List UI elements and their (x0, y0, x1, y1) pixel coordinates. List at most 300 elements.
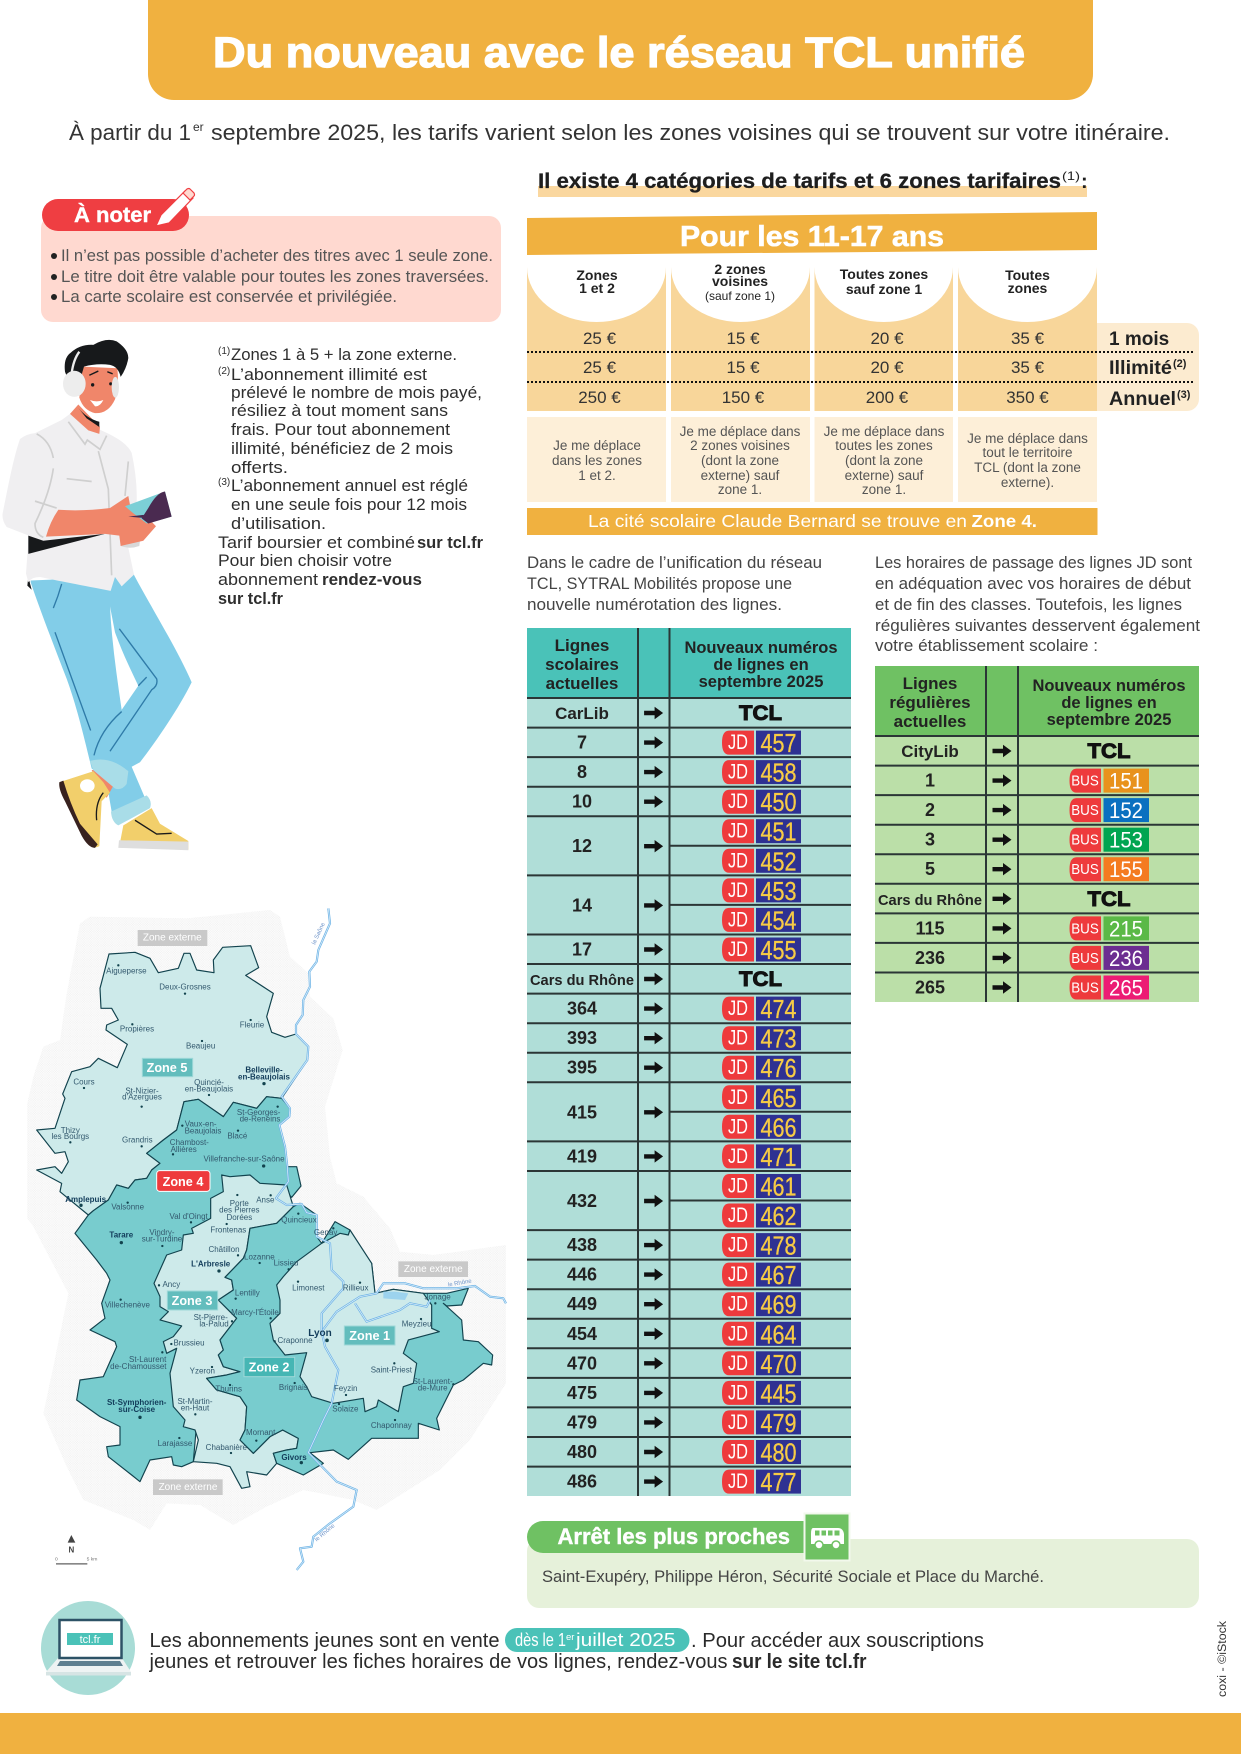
column: toutes zones: 350 € (1006, 388, 1049, 407)
intro text: lignes régulières: votre établissement scolaire : (875, 637, 1098, 655)
row: 3 to BUS 153: BUS (1071, 832, 1099, 849)
row: 415 to JD 465 and 466: 465 (760, 1083, 796, 1113)
town labels north: Grandris (122, 1136, 153, 1145)
town labels south: St-Martin- (177, 1397, 213, 1406)
footnotes: sur tcl.fr (417, 533, 483, 552)
town labels south: L'Arbresle (191, 1260, 231, 1269)
town labels south: Craponne (277, 1336, 313, 1345)
footnotes: Tarif boursier et combiné (218, 533, 415, 552)
town labels north: Fleurie (240, 1020, 265, 1029)
town labels north: Beaujolais (185, 1127, 221, 1136)
river names: le Rhône (314, 1523, 337, 1543)
row: 454 to JD 464: 454 (567, 1324, 597, 1344)
footer band (0, 1713, 1241, 1754)
footnotes: (3) (218, 477, 230, 488)
footnotes: sur tcl.fr (218, 589, 283, 608)
row: 7 to JD 457: 457 (760, 728, 796, 758)
intro text: lignes régulières: et de fin des classes. Toutefois, les lignes (875, 596, 1182, 614)
banner: pour les 11-17 ans (527, 212, 1097, 255)
subtitle: À partir du 1 (69, 120, 191, 145)
heading: catégories de tarifs: (1) (1062, 169, 1080, 183)
column: zones 1 et 2: 1 et 2 (579, 280, 615, 296)
zone labels: Zone 1 (349, 1329, 390, 1343)
description: 2 zones voisines: Je me déplace dans (680, 424, 801, 439)
footnotes: en une seule fois pour 12 mois (231, 495, 467, 514)
heading: catégories de tarifs: : (1081, 171, 1088, 193)
table header: scolaires (545, 655, 619, 674)
town labels north: des Pierres (219, 1206, 260, 1215)
header banner (148, 0, 1093, 100)
row: 2 to BUS 152 (925, 798, 1149, 823)
town labels south: Ancy (162, 1280, 180, 1289)
date pill: dès le 1 (515, 1630, 566, 1650)
row: 14 to JD 453 and 454: 454 (760, 905, 796, 935)
town labels south: la-Palud (199, 1320, 229, 1329)
row: 14 to JD 453 and 454 (572, 876, 801, 935)
town labels south: St-Laurent (129, 1355, 167, 1364)
bottom text (149, 1628, 984, 1673)
banner: pour les 11-17 ans: Pour les 11-17 ans (680, 221, 944, 253)
row: 17 to JD 455: 17 (572, 940, 592, 960)
row: CarLib: TCL (739, 702, 782, 725)
footnotes: L’abonnement illimité est (231, 365, 427, 384)
row: 10 to JD 450: 450 (760, 787, 796, 817)
row: 432 to JD 461 and 462: 462 (760, 1201, 796, 1231)
row: 486 to JD 477: 486 (567, 1472, 597, 1492)
row: 236 to BUS 236 (915, 946, 1149, 971)
town labels north: Beaujeu (186, 1041, 215, 1050)
column: 2 zones voisines: (sauf zone 1) (705, 289, 775, 303)
column: toutes zones sauf zone 1: 200 € (866, 388, 909, 407)
description: zones 1 et 2 (527, 417, 666, 502)
heading: catégories de tarifs: Il existe 4 catégories de tarifs et 6 zones tarifaires (538, 170, 1061, 193)
row: 449 to JD 469: 469 (760, 1290, 796, 1320)
town labels north: de-Reneins (240, 1115, 280, 1124)
heading: Arrêt les plus proches (558, 1524, 790, 1549)
row: 115 to BUS 215 (915, 916, 1149, 941)
row: 364 to JD 474: JD (728, 997, 748, 1020)
town labels south: Lentilly (235, 1289, 260, 1298)
footnotes (218, 345, 483, 608)
row: 432 to JD 461 and 462: 461 (760, 1172, 796, 1202)
panel: tarifs 11-17 ans (527, 212, 1199, 535)
row: 17 to JD 455: 455 (760, 935, 796, 965)
town labels north: Porte (230, 1199, 249, 1208)
period labels: Illimité (1109, 358, 1172, 379)
row: 449 to JD 469: JD (728, 1293, 748, 1316)
row: 5 to BUS 155: 5 (925, 859, 935, 879)
row: 12 to JD 451 and 452: 12 (572, 836, 592, 856)
row: 14 to JD 453 and 454: 14 (572, 895, 592, 915)
row: 446 to JD 467: 467 (760, 1260, 796, 1290)
description: toutes zones sauf zone 1: (dont la zone (845, 453, 923, 468)
period labels: (3) (1177, 389, 1191, 401)
town labels south: Villechenève (105, 1301, 150, 1310)
row: 419 to JD 471: JD (728, 1145, 748, 1168)
town labels north: Belleville- (245, 1066, 283, 1075)
row: 480 to JD 480: 480 (760, 1438, 796, 1468)
intro text: lignes scolaires: nouvelle numérotation des lignes. (527, 596, 782, 614)
town labels south: St-Laurent- (413, 1377, 453, 1386)
town labels south: Yzeron (190, 1367, 215, 1376)
town labels north: Aigueperse (106, 966, 147, 975)
town labels north: Amplepuis (65, 1195, 107, 1204)
subtitle: septembre 2025, les tarifs varient selon les zones voisines qui se trouvent sur votre itinéraire. (211, 120, 1170, 145)
row: 12 to JD 451 and 452 (572, 817, 801, 876)
table header: de lignes en (1061, 694, 1157, 712)
table header: actuelles (546, 674, 618, 693)
column: zones 1 et 2: 25 € (583, 329, 617, 348)
column: zones 1 et 2: 250 € (578, 388, 621, 407)
row: 480 to JD 480 (567, 1438, 801, 1468)
row: 479 to JD 479: JD (728, 1411, 748, 1434)
column: toutes zones (958, 267, 1097, 411)
town labels north: Vaux-en- (185, 1120, 217, 1129)
table header: régulières (889, 693, 971, 712)
map of tariff zones (27, 908, 506, 1570)
row: 432 to JD 461 and 462: JD (728, 1174, 748, 1198)
intro text: lignes régulières: en adéquation avec vos horaires de début (875, 575, 1191, 593)
town labels south: Marcy-l'Étoile (231, 1308, 279, 1317)
row: 393 to JD 473 (567, 1024, 801, 1054)
row: 475 to JD 445: 475 (567, 1383, 597, 1403)
row: 393 to JD 473: 473 (760, 1024, 796, 1054)
row: 419 to JD 471: 419 (567, 1146, 597, 1166)
row: 454 to JD 464 (567, 1319, 801, 1349)
column: toutes zones: 35 € (1011, 358, 1045, 377)
town labels south: Chaponnay (371, 1421, 412, 1430)
intro text: lignes scolaires: Dans le cadre de l’unification du réseau (527, 554, 822, 572)
row: 415 to JD 465 and 466: 415 (567, 1102, 597, 1122)
row: 10 to JD 450 (572, 787, 801, 817)
column: toutes zones sauf zone 1: Toutes zones (840, 266, 928, 282)
row: 265 to BUS 265: BUS (1071, 980, 1099, 996)
row: 470 to JD 470: 470 (567, 1353, 597, 1373)
row: 419 to JD 471 (567, 1142, 801, 1172)
footnotes: résiliez à tout moment sans (231, 401, 448, 420)
row: 1 to BUS 151: 1 (925, 771, 935, 791)
row: 449 to JD 469 (567, 1290, 801, 1320)
column: 2 zones voisines: 150 € (722, 388, 765, 407)
bullet list: La carte scolaire est conservée et privilégiée. (61, 288, 397, 306)
description: toutes zones sauf zone 1: Je me déplace dans (824, 424, 945, 439)
row: 115 to BUS 215: BUS (1071, 920, 1099, 937)
row: 432 to JD 461 and 462: JD (728, 1204, 748, 1227)
town labels north: Anse (256, 1196, 275, 1205)
town labels south: St-Pierre- (194, 1313, 228, 1322)
row: 475 to JD 445: 445 (760, 1378, 796, 1408)
description: toutes zones sauf zone 1: zone 1. (862, 482, 906, 497)
row: 1 to BUS 151 (925, 769, 1149, 794)
description: toutes zones sauf zone 1: toutes les zones (835, 438, 933, 453)
table header: Lignes (903, 674, 957, 693)
town labels south: Feyzin (334, 1384, 357, 1393)
row: 2 to BUS 152: 152 (1109, 798, 1143, 823)
row: Cars du Rhône: Cars du Rhône (878, 892, 982, 909)
row: 5 to BUS 155: BUS (1071, 861, 1099, 878)
row: 479 to JD 479: 479 (567, 1412, 597, 1432)
footnotes: (2) (218, 366, 230, 377)
row: 364 to JD 474 (567, 994, 801, 1024)
town labels south: St-Symphorien- (107, 1398, 167, 1407)
footnotes: Pour bien choisir votre (218, 551, 392, 570)
table: lignes scolaires (527, 628, 851, 1497)
row: 486 to JD 477: JD (728, 1470, 748, 1493)
town labels north: Propières (120, 1025, 154, 1034)
row: 432 to JD 461 and 462 (567, 1172, 801, 1231)
row: 395 to JD 476: 476 (760, 1053, 796, 1083)
town labels north: en-Beaujolais (238, 1073, 291, 1082)
row: 438 to JD 478: 438 (567, 1235, 597, 1255)
row: Cars du Rhône: Cars du Rhône (530, 972, 634, 989)
table header: Nouveaux numéros (684, 639, 838, 657)
row: 415 to JD 465 and 466: JD (728, 1086, 748, 1109)
row: 415 to JD 465 and 466 (567, 1083, 801, 1142)
title: Du nouveau avec le réseau TCL unifié (213, 29, 1025, 77)
town labels south: Chabanière (206, 1443, 248, 1452)
north arrow and scale (55, 1535, 97, 1565)
footnotes: offerts. (231, 458, 288, 477)
town labels north: Allières (171, 1145, 197, 1154)
row: 5 to BUS 155 (925, 857, 1149, 882)
row: 10 to JD 450: JD (728, 790, 748, 813)
town labels south: de-Chamousset (110, 1362, 167, 1371)
footnotes: rendez-vous (322, 570, 422, 589)
river names: le Rhône (448, 1278, 473, 1289)
town labels south: Meyzieu (402, 1320, 432, 1329)
row: 454 to JD 464: JD (728, 1322, 748, 1345)
row: 486 to JD 477: 477 (760, 1467, 796, 1497)
row: 8 to JD 458: 458 (760, 758, 796, 788)
row: Cars du Rhône: TCL (1088, 888, 1131, 911)
row: 8 to JD 458: JD (728, 761, 748, 784)
illustration: young man with headphones holding a card (2, 340, 192, 850)
town labels south: Solaize (332, 1405, 359, 1414)
row: 470 to JD 470: JD (728, 1352, 748, 1375)
table header: de lignes en (713, 656, 809, 674)
town labels north: Villefranche-sur-Saône (203, 1155, 285, 1164)
stops text: Saint-Exupéry, Philippe Héron, Sécurité Sociale et Place du Marché. (542, 1568, 1044, 1586)
zone labels: Zone 2 (249, 1360, 289, 1374)
footnotes: frais. Pour tout abonnement (231, 420, 450, 439)
row: 486 to JD 477 (567, 1467, 801, 1497)
row: 415 to JD 465 and 466: 466 (760, 1112, 796, 1142)
zone 2 (207, 1203, 493, 1475)
zone labels: Zone 4 (163, 1175, 203, 1189)
town labels north: d'Azergues (122, 1093, 162, 1102)
column: toutes zones: zones (1008, 280, 1048, 296)
row: 446 to JD 467 (567, 1260, 801, 1290)
row: 1 to BUS 151: 151 (1109, 769, 1143, 794)
period labels: (2) (1173, 358, 1187, 370)
town labels north: St-Nizier- (125, 1087, 159, 1096)
town labels south: Brignais (279, 1383, 308, 1392)
icon: laptop tcl.fr (41, 1601, 135, 1695)
row: Cars du Rhône (530, 968, 782, 991)
row: 449 to JD 469: 449 (567, 1294, 597, 1314)
row: 17 to JD 455: JD (728, 938, 748, 961)
banner: cité scolaire zone 4: La cité scolaire Claude Bernard se trouve en (588, 511, 967, 531)
town labels south: Frontenas (210, 1226, 246, 1235)
date pill (505, 1628, 690, 1652)
green heading pill (527, 1521, 804, 1553)
description: zones 1 et 2: dans les zones (552, 453, 642, 468)
footnotes: L’abonnement annuel est réglé (231, 476, 468, 495)
north arrow and scale: 5 km (87, 1557, 97, 1563)
row: 3 to BUS 153: 3 (925, 830, 935, 850)
row: 480 to JD 480: 480 (567, 1442, 597, 1462)
table: lignes régulières (875, 666, 1199, 1002)
zone labels: Zone externe (143, 933, 202, 944)
table header: septembre 2025 (1047, 711, 1171, 729)
description: 2 zones voisines (671, 417, 810, 502)
description: 2 zones voisines: externe) sauf (701, 468, 780, 483)
row: CarLib: CarLib (555, 704, 609, 723)
row: 10 to JD 450: 10 (572, 792, 592, 812)
row: 438 to JD 478: 478 (760, 1231, 796, 1261)
town labels north: en-Beaujolais (185, 1085, 233, 1094)
row: 364 to JD 474: 474 (760, 994, 796, 1024)
town labels south: sur-Coise (118, 1405, 156, 1414)
zone labels: Zone externe (404, 1264, 463, 1275)
town labels north (51, 964, 317, 1225)
town labels south (105, 1223, 454, 1464)
zone labels: Zone externe (159, 1482, 218, 1493)
description: toutes zones: TCL (dont la zone (974, 460, 1081, 475)
town labels south: sur-Turdine (142, 1235, 183, 1244)
intro text: lignes régulières: Les horaires de passage des lignes JD sont (875, 554, 1192, 572)
subtitle: er (193, 120, 204, 134)
zone 3 (154, 1175, 298, 1488)
row: Cars du Rhône: TCL (739, 968, 782, 991)
row: 419 to JD 471: 471 (760, 1142, 796, 1172)
table header: actuelles (894, 712, 966, 731)
row: 12 to JD 451 and 452: 451 (760, 817, 796, 847)
table header (889, 674, 1186, 731)
row: 395 to JD 476: 395 (567, 1058, 597, 1078)
bottom text: Les abonnements jeunes sont en vente (150, 1629, 500, 1652)
column: 2 zones voisines: 15 € (726, 329, 760, 348)
row: 479 to JD 479 (567, 1408, 801, 1438)
row: CityLib (901, 740, 1131, 763)
river names (311, 921, 473, 1543)
column: 2 zones voisines (671, 261, 810, 411)
zone labels: Zone 5 (147, 1061, 187, 1075)
row: 438 to JD 478: JD (728, 1234, 748, 1257)
row: 475 to JD 445: JD (728, 1381, 748, 1404)
table header (545, 636, 838, 693)
row: 364 to JD 474: 364 (567, 999, 597, 1019)
row: 470 to JD 470: 470 (760, 1349, 796, 1379)
footnotes: illimité, bénéficiez de 2 mois (231, 439, 453, 458)
row: 8 to JD 458: 8 (577, 762, 587, 782)
river: la Saône and le Rhône (276, 908, 506, 1570)
description: toutes zones: tout le territoire (982, 445, 1073, 460)
zone 5 (37, 946, 308, 1215)
town labels south: Genay (314, 1228, 337, 1237)
river names: la Saône (311, 921, 327, 946)
credit: coxi - ©iStock (1217, 1621, 1229, 1697)
town labels north: St-Georges- (237, 1108, 281, 1117)
town labels north: Thizy (61, 1126, 80, 1135)
à noter pill (42, 199, 189, 231)
right-hand period panel (1097, 323, 1199, 411)
town labels north: Cours (73, 1078, 95, 1087)
row: 393 to JD 473: 393 (567, 1028, 597, 1048)
column: 2 zones voisines: 15 € (726, 358, 760, 377)
description: toutes zones: externe). (1001, 475, 1054, 490)
row: 8 to JD 458 (577, 758, 801, 788)
row: 265 to BUS 265: 265 (915, 978, 945, 998)
bullet list (51, 247, 493, 306)
town labels north: Blacé (227, 1132, 248, 1141)
intro text: lignes scolaires: TCL, SYTRAL Mobilités propose une (527, 575, 792, 593)
description: toutes zones sauf zone 1 (814, 417, 953, 502)
panel: arrêts les plus proches (527, 1514, 1199, 1608)
period labels: 1 mois (1109, 329, 1169, 350)
row: 432 to JD 461 and 462: 432 (567, 1191, 597, 1211)
town labels south: Larajasse (158, 1439, 193, 1448)
town labels north: Chambost- (170, 1138, 209, 1147)
town labels north: les Bourgs (51, 1132, 89, 1141)
date pill: er (566, 1632, 574, 1643)
row: 470 to JD 470 (567, 1349, 801, 1379)
row: 3 to BUS 153 (925, 828, 1149, 853)
zone 1 (270, 1230, 439, 1412)
period labels (1109, 329, 1191, 410)
description: 2 zones voisines: 2 zones voisines (690, 438, 790, 453)
column: toutes zones sauf zone 1: 20 € (870, 358, 904, 377)
column: zones 1 et 2: 25 € (583, 358, 617, 377)
banner: cité scolaire zone 4: Zone 4. (972, 511, 1037, 531)
à noter heading: À noter (74, 204, 151, 227)
town labels south: en-Haut (181, 1404, 210, 1413)
column: toutes zones: Toutes (1005, 267, 1050, 283)
bottom text: sur le site tcl.fr (732, 1650, 867, 1673)
town labels south: Saint-Priest (371, 1366, 413, 1375)
town labels north: Quincié- (194, 1078, 224, 1087)
row: 446 to JD 467: JD (728, 1263, 748, 1286)
row: 446 to JD 467: 446 (567, 1265, 597, 1285)
column: toutes zones sauf zone 1: 20 € (870, 329, 904, 348)
row: 5 to BUS 155: 155 (1109, 857, 1143, 882)
description: zones 1 et 2: 1 et 2. (578, 468, 616, 483)
row: 14 to JD 453 and 454: JD (728, 908, 748, 931)
description: 2 zones voisines: (dont la zone (701, 453, 779, 468)
intro text: lignes régulières: régulières suivantes desservent également (875, 617, 1200, 635)
row: Cars du Rhône (878, 888, 1131, 911)
row: 14 to JD 453 and 454: 453 (760, 876, 796, 906)
row: 475 to JD 445 (567, 1378, 801, 1408)
row: 1 to BUS 151: BUS (1071, 773, 1099, 790)
zone externe background (27, 910, 506, 1530)
footnotes: prélevé le nombre de mois payé, (231, 383, 482, 402)
row: CityLib: CityLib (901, 742, 959, 761)
bullet list: Le titre doit être valable pour toutes les zones traversées. (61, 268, 489, 286)
row: 438 to JD 478 (567, 1231, 801, 1261)
town labels south: Châtillon (208, 1245, 240, 1254)
footnotes: Zones 1 à 5 + la zone externe. (231, 345, 457, 364)
table header: Lignes (555, 636, 609, 655)
bottom text: . Pour accéder aux souscriptions (691, 1629, 984, 1652)
column: 2 zones voisines: 2 zones (714, 261, 766, 277)
town labels south: Vindry- (149, 1228, 175, 1237)
row: 12 to JD 451 and 452: JD (728, 849, 748, 872)
description: zones 1 et 2: Je me déplace (553, 438, 641, 453)
town labels south: Lozanne (244, 1253, 275, 1262)
town labels south: Jonage (425, 1293, 451, 1302)
row: 115 to BUS 215: 115 (915, 918, 945, 938)
